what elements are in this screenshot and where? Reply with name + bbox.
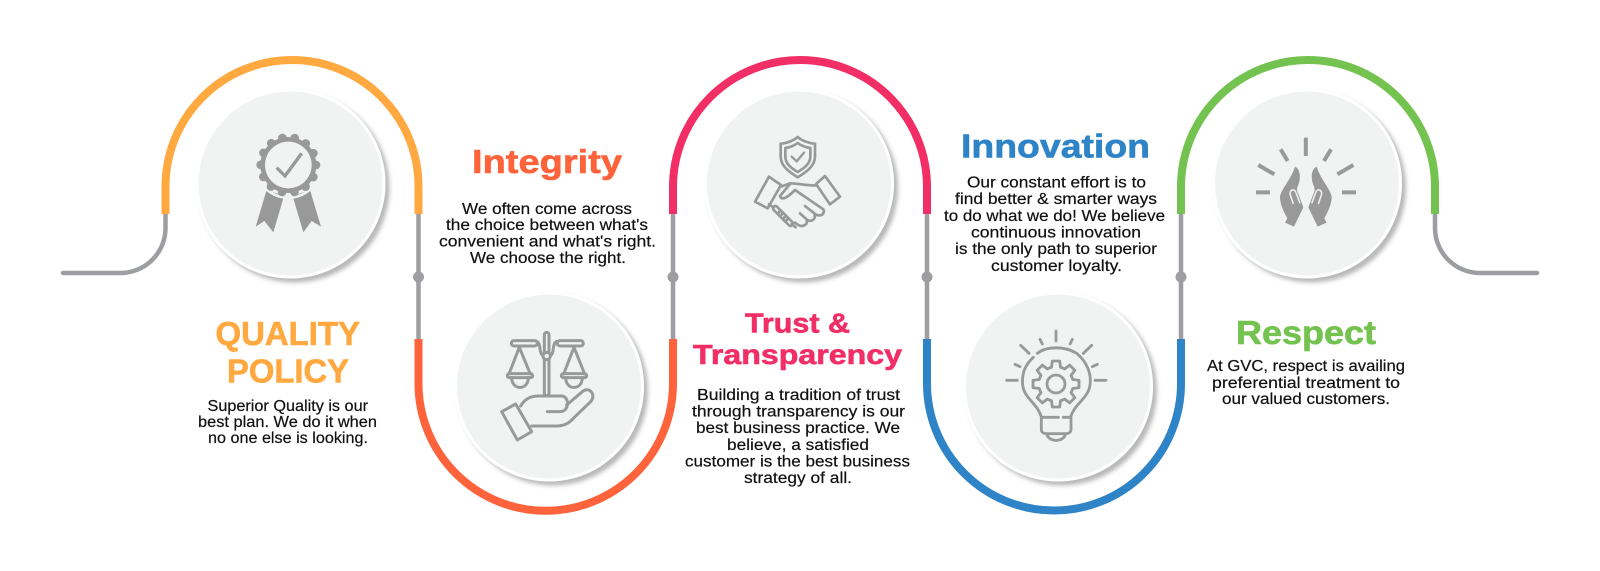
text: integrity description: convenient and what's right. bbox=[439, 234, 656, 250]
text: respect description: preferential treatment to bbox=[1212, 375, 1400, 392]
arc: orange bbox=[166, 60, 418, 214]
text: innovation description bbox=[944, 174, 1165, 275]
text: trust description: through transparency is our bbox=[692, 404, 905, 420]
text: integrity description: the choice between what's bbox=[446, 217, 648, 234]
icon: shield and handshake bbox=[755, 137, 840, 227]
heading: quality policy bbox=[216, 315, 360, 390]
heading: innovation: Innovation bbox=[961, 128, 1150, 164]
text: trust description: believe, a satisfied bbox=[727, 437, 869, 454]
text: quality policy description: best plan. We do it when bbox=[198, 414, 377, 431]
text: trust description: strategy of all. bbox=[744, 470, 852, 487]
connector: right tail bbox=[1435, 212, 1537, 273]
connector: vertical link 3 bbox=[922, 212, 932, 341]
text: respect description bbox=[1207, 358, 1405, 408]
text: integrity description: We choose the right. bbox=[470, 250, 626, 267]
text: trust description: Building a tradition of trust bbox=[697, 387, 901, 404]
text: innovation description: continuous innovation bbox=[971, 224, 1141, 242]
arc: pink bbox=[673, 60, 927, 214]
icon: rosette with check bbox=[256, 132, 321, 232]
panel: innovation bbox=[927, 128, 1181, 510]
icon: hands with rays bbox=[1256, 138, 1356, 227]
panel: integrity bbox=[418, 143, 673, 511]
text: trust description bbox=[685, 387, 910, 487]
icon circle: innovation bbox=[963, 292, 1153, 482]
panel: respect bbox=[1181, 60, 1435, 408]
connector: vertical link 1 bbox=[413, 212, 424, 341]
text: innovation description: Our constant effort is to bbox=[967, 174, 1146, 192]
heading: trust and transparency bbox=[693, 308, 902, 370]
text: integrity description bbox=[439, 201, 656, 267]
panel: quality policy bbox=[166, 60, 418, 447]
text: innovation description: find better & smarter ways bbox=[955, 191, 1157, 208]
text: innovation description: customer loyalty. bbox=[991, 258, 1122, 275]
heading: trust and transparency: Transparency bbox=[693, 339, 902, 370]
text: quality policy description bbox=[198, 398, 377, 447]
text: innovation description: is the only path to superior bbox=[955, 241, 1157, 258]
icon circle: integrity bbox=[454, 292, 644, 482]
arc: blue bbox=[927, 339, 1181, 510]
connector: vertical link 2 bbox=[668, 212, 678, 341]
icon part: handshake bbox=[755, 176, 840, 227]
heading: quality policy: QUALITY bbox=[216, 315, 360, 352]
arc: green bbox=[1181, 60, 1435, 214]
arc: red-orange bbox=[418, 339, 673, 511]
text: respect description: our valued customers. bbox=[1222, 391, 1390, 408]
icon circle: trust bbox=[704, 88, 894, 278]
icon: light bulb with gear bbox=[1007, 331, 1106, 440]
icon part: shield bbox=[781, 137, 815, 177]
icon circle: quality bbox=[196, 88, 386, 278]
connector: left tail bbox=[63, 212, 166, 273]
icon circle: respect bbox=[1212, 88, 1402, 278]
icon: scales on hand bbox=[502, 332, 593, 440]
text: trust description: customer is the best business bbox=[685, 454, 910, 470]
text: integrity description: We often come across bbox=[462, 201, 632, 218]
heading: integrity: Integrity bbox=[472, 143, 623, 180]
text: trust description: best business practice. We bbox=[696, 420, 900, 437]
text: innovation description: to do what we do! We believe bbox=[944, 208, 1165, 225]
text: respect description: At GVC, respect is availing bbox=[1207, 358, 1405, 375]
heading: respect: Respect bbox=[1236, 314, 1376, 351]
heading: quality policy: POLICY bbox=[227, 352, 349, 390]
text: quality policy description: Superior Quality is our bbox=[208, 398, 368, 415]
panel: trust and transparency bbox=[673, 60, 927, 487]
heading: trust and transparency: Trust & bbox=[745, 308, 850, 338]
text: quality policy description: no one else is looking. bbox=[208, 430, 368, 447]
connector: vertical link 4 bbox=[1176, 212, 1186, 341]
